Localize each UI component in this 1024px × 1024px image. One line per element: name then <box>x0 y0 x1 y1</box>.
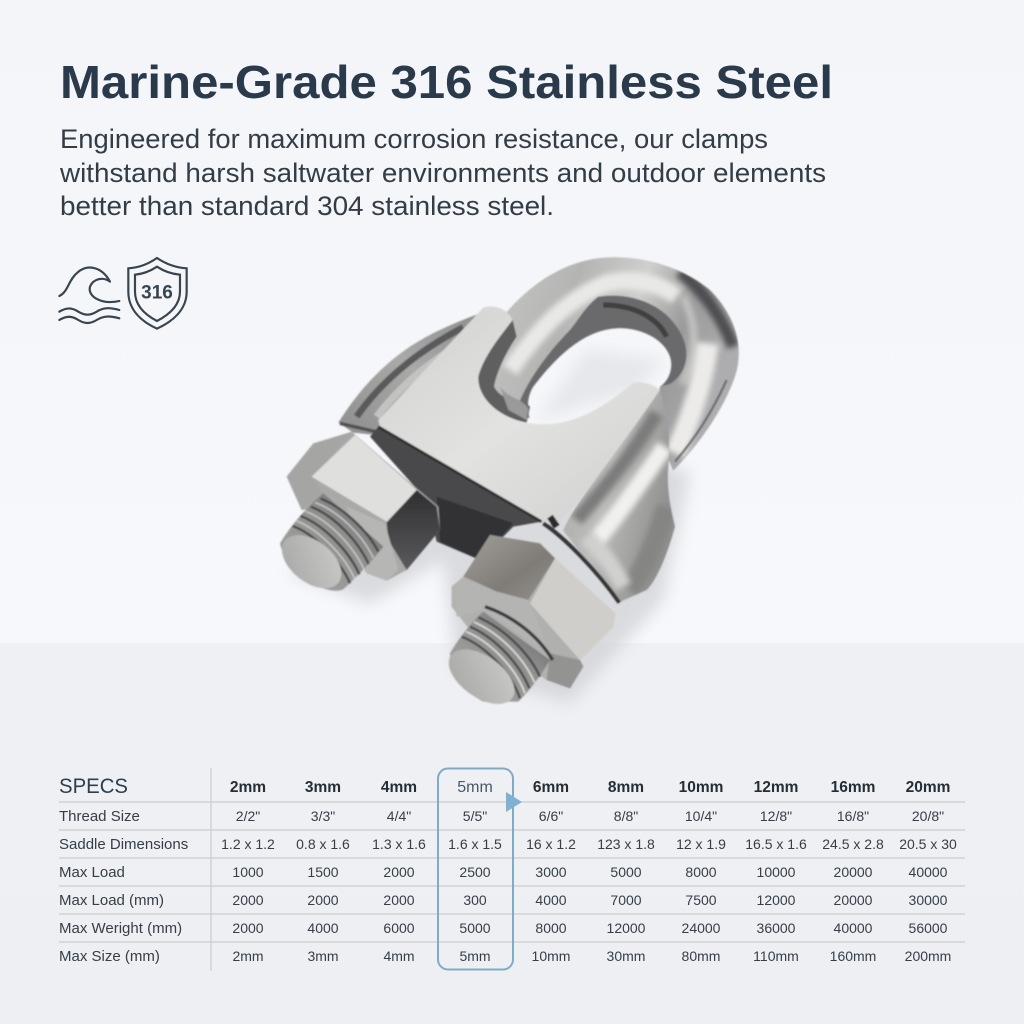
max load row <box>232 864 948 880</box>
max size row: 110mm <box>753 948 799 964</box>
intro paragraph <box>59 124 826 221</box>
max load row: 2500 <box>459 864 491 880</box>
saddle dimensions row: 123 x 1.8 <box>597 836 655 852</box>
column headers: 10mm <box>679 779 723 796</box>
row labels: Saddle Dimensions <box>59 836 188 853</box>
max weight row <box>232 920 948 936</box>
max load mm row: 2000 <box>232 892 264 908</box>
max load row: 2000 <box>383 864 415 880</box>
product photo: stainless steel wire rope clamp <box>272 257 739 715</box>
max load row: 1500 <box>307 864 339 880</box>
thread size row: 10/4" <box>685 808 717 824</box>
max load row: 10000 <box>757 864 796 880</box>
5mm column highlight <box>438 768 513 970</box>
icon: ocean wave <box>59 268 119 323</box>
thread size row: 5/5" <box>463 808 487 824</box>
row labels: Max Load <box>59 864 125 881</box>
max weight row: 5000 <box>459 920 491 936</box>
max load mm row: 30000 <box>909 892 948 908</box>
thread size row: 12/8" <box>760 808 792 824</box>
specs heading: SPECS <box>59 775 128 798</box>
max size row <box>232 948 951 964</box>
saddle dimensions row: 0.8 x 1.6 <box>296 836 350 852</box>
max load row: 1000 <box>232 864 264 880</box>
U-bolt inner hollow <box>517 296 686 418</box>
thread size row <box>236 808 944 824</box>
max load row: 3000 <box>535 864 567 880</box>
soft contact shadows <box>290 350 690 703</box>
saddle dimensions row: 1.2 x 1.2 <box>221 836 275 852</box>
U-bolt <box>490 257 739 471</box>
saddle dimensions row: 1.6 x 1.5 <box>448 836 502 852</box>
saddle dimensions row: 12 x 1.9 <box>676 836 726 852</box>
max size row: 30mm <box>607 948 645 964</box>
rear saddle <box>338 314 503 437</box>
thread size row: 2/2" <box>236 808 260 824</box>
icon: 316 shield: 316 <box>141 282 173 303</box>
max weight row: 2000 <box>232 920 264 936</box>
column headers: 16mm <box>831 779 875 796</box>
column headers: 5mm <box>457 779 493 796</box>
nut 1 <box>287 432 440 581</box>
max load mm row: 2000 <box>383 892 415 908</box>
intro paragraph: withstand harsh saltwater environments and outdoor elements <box>59 158 826 188</box>
front saddle top face <box>378 307 660 524</box>
max size row: 200mm <box>905 948 951 964</box>
intro paragraph: Engineered for maximum corrosion resistance, our clamps <box>60 124 768 154</box>
max weight row: 6000 <box>383 920 415 936</box>
thread size row: 16/8" <box>837 808 869 824</box>
max weight row: 40000 <box>834 920 873 936</box>
max size row: 5mm <box>459 948 491 964</box>
saddle dimensions row: 16 x 1.2 <box>526 836 576 852</box>
row labels: Thread Size <box>59 808 140 825</box>
max load row: 5000 <box>610 864 642 880</box>
column headers: 4mm <box>381 779 417 796</box>
max load mm row: 4000 <box>535 892 567 908</box>
max load row: 8000 <box>685 864 717 880</box>
max load mm row: 20000 <box>834 892 873 908</box>
max load mm row: 2000 <box>307 892 339 908</box>
max load mm row: 12000 <box>757 892 796 908</box>
column headers: 3mm <box>305 779 341 796</box>
thread size row: 6/6" <box>539 808 563 824</box>
saddle dimensions row: 24.5 x 2.8 <box>822 836 884 852</box>
saddle gap line <box>543 523 619 603</box>
thread size row: 4/4" <box>387 808 411 824</box>
max load row: 40000 <box>909 864 948 880</box>
thread size row: 3/3" <box>311 808 335 824</box>
max size row: 3mm <box>307 948 339 964</box>
max load mm row: 7500 <box>685 892 717 908</box>
dark underside <box>370 427 542 560</box>
title: Marine-Grade 316 Stainless Steel <box>60 56 833 108</box>
thread 2 <box>450 612 550 702</box>
saddle dimensions row: 16.5 x 1.6 <box>745 836 807 852</box>
max load row: 20000 <box>834 864 873 880</box>
icon: 316 shield <box>128 258 187 329</box>
max load mm row: 300 <box>463 892 487 908</box>
row labels: Max Weright (mm) <box>59 920 182 937</box>
thread size row: 8/8" <box>614 808 638 824</box>
spec table <box>59 768 965 971</box>
max weight row: 24000 <box>682 920 721 936</box>
arrow marker <box>506 792 522 812</box>
row labels: Max Size (mm) <box>59 948 160 965</box>
U-bolt shading bands <box>510 272 733 462</box>
column headers: 6mm <box>533 779 569 796</box>
saddle right side <box>563 390 675 603</box>
saddle dimensions row <box>221 836 957 852</box>
column headers: 20mm <box>906 779 950 796</box>
row labels <box>59 808 188 965</box>
thread size row: 20/8" <box>912 808 944 824</box>
max load mm row: 7000 <box>610 892 642 908</box>
nut 2 <box>452 535 615 688</box>
column headers: 2mm <box>230 779 266 796</box>
saddle notch wall <box>478 320 530 423</box>
saddle side shading bands <box>577 413 667 590</box>
max size row: 4mm <box>383 948 415 964</box>
max size row: 160mm <box>830 948 876 964</box>
column headers: 12mm <box>754 779 798 796</box>
intro paragraph: better than standard 304 stainless steel. <box>60 191 554 221</box>
max weight row: 12000 <box>607 920 646 936</box>
table rules <box>59 768 965 971</box>
max size row: 2mm <box>232 948 264 964</box>
saddle dimensions row: 1.3 x 1.6 <box>372 836 426 852</box>
max size row: 80mm <box>682 948 720 964</box>
thread 1 <box>280 493 383 591</box>
max weight row: 8000 <box>535 920 567 936</box>
max weight row: 36000 <box>757 920 796 936</box>
max size row: 10mm <box>532 948 570 964</box>
row labels: Max Load (mm) <box>59 892 164 909</box>
column headers: 8mm <box>608 779 644 796</box>
max load mm row <box>232 892 948 908</box>
max weight row: 56000 <box>909 920 948 936</box>
max weight row: 4000 <box>307 920 339 936</box>
column headers <box>230 779 950 796</box>
saddle dimensions row: 20.5 x 30 <box>899 836 957 852</box>
